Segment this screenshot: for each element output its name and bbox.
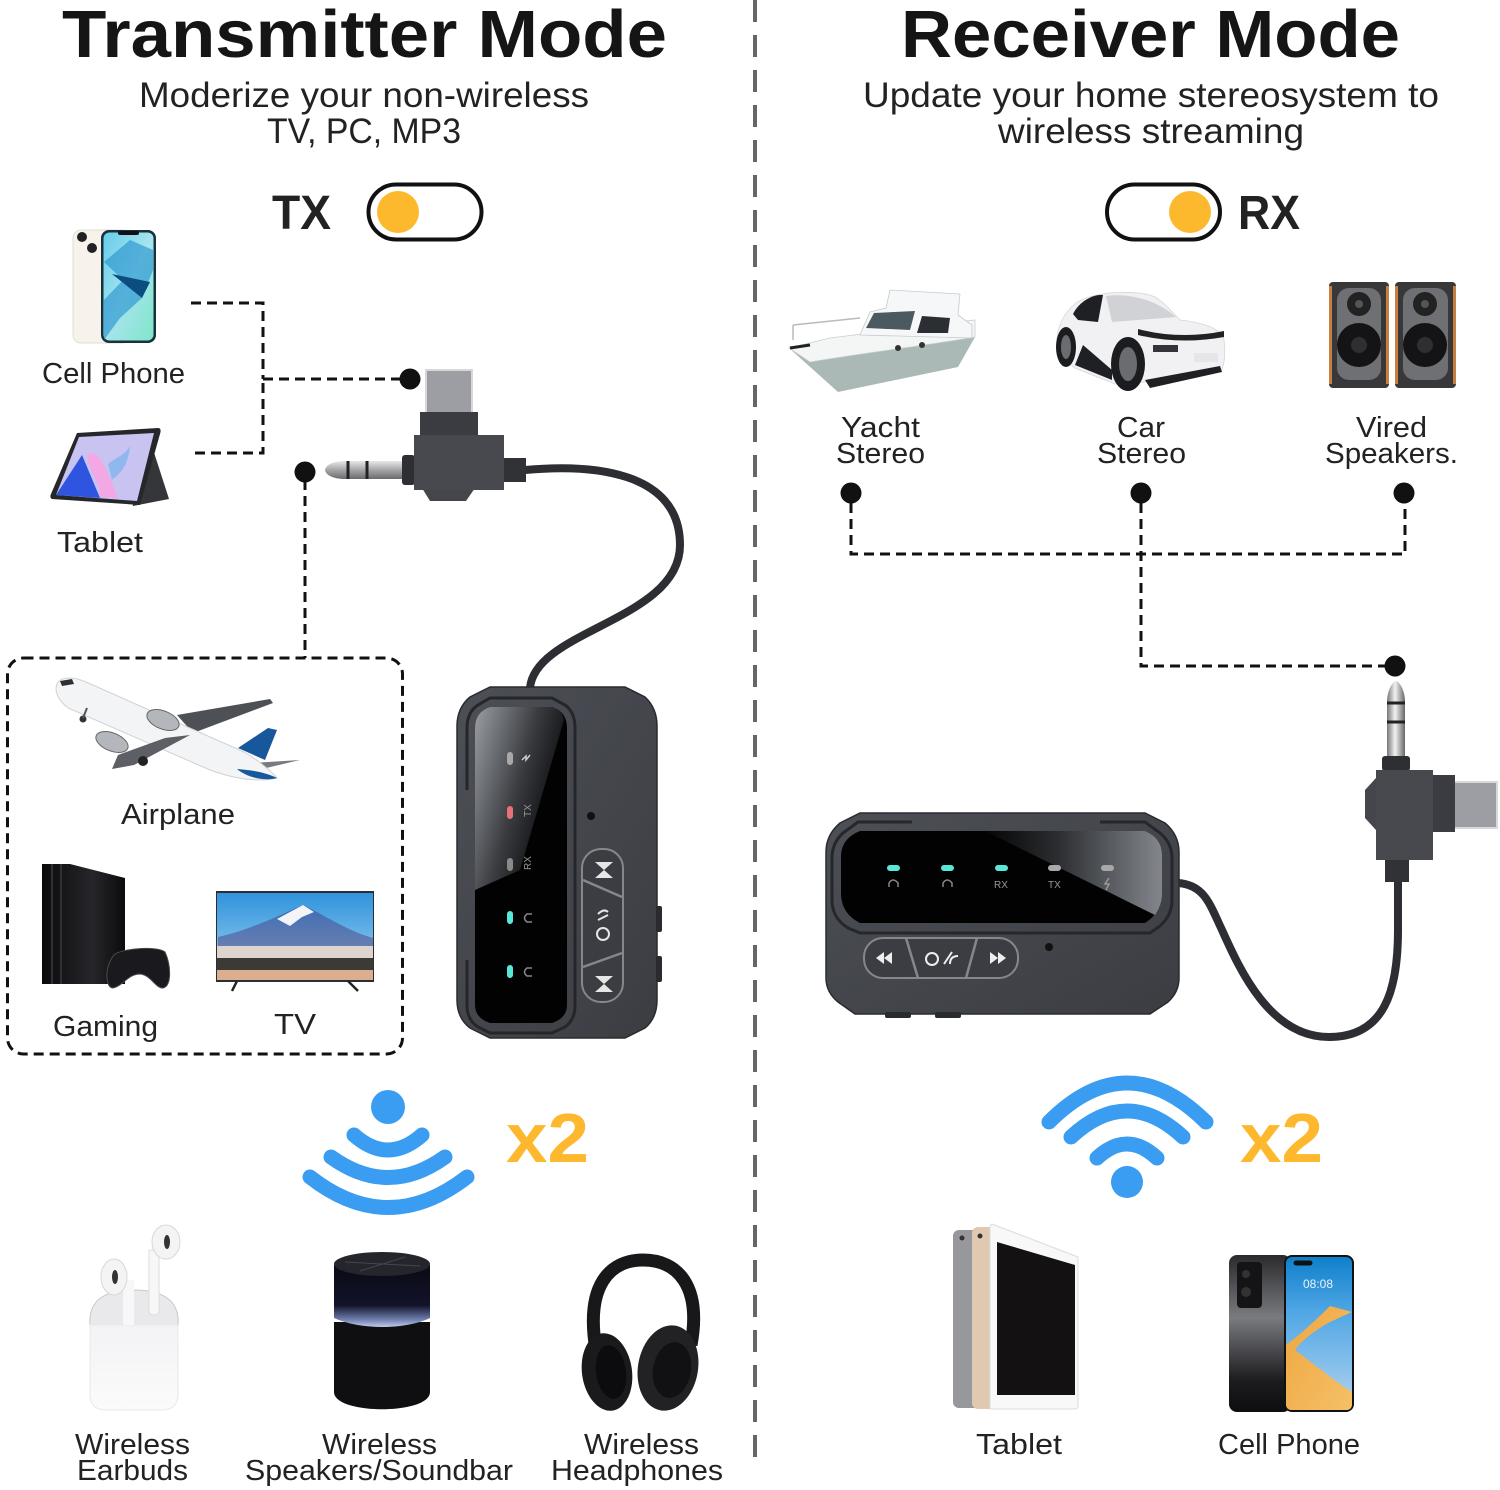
USB-C plug (1454, 782, 1497, 828)
LEDs (887, 865, 900, 871)
device: transmitter adapter with cable (325, 370, 680, 1038)
label: wired speakers: Speakers. (1325, 438, 1458, 470)
T-joint (420, 412, 478, 436)
center divider (753, 0, 757, 1460)
label: cell phone: Cell Phone (42, 358, 185, 390)
icon: wireless speaker (334, 1252, 430, 1409)
TX switch (272, 184, 482, 240)
label: wireless earbuds (75, 1429, 190, 1487)
unit body (457, 687, 657, 1038)
AUX plug (325, 461, 402, 479)
label: wireless headphones: Wireless (584, 1429, 699, 1461)
cable (1178, 878, 1398, 1037)
buttons (582, 849, 623, 1002)
icon: wireless headphones (577, 1260, 705, 1416)
icon: gaming console (42, 864, 170, 988)
icon: airplane (56, 678, 300, 780)
heading: transmitter mode: TV, PC, MP3 (267, 112, 461, 151)
wifi x2 transmit (310, 1090, 589, 1208)
heading: receiver mode: Update your home stereosystem to (863, 76, 1439, 115)
label: wireless headphones (551, 1429, 723, 1487)
wifi x2 receive (1049, 1083, 1323, 1198)
device: receiver adapter with cable (826, 681, 1497, 1037)
icon: tablets (953, 1224, 1078, 1409)
RX switch (1107, 184, 1300, 240)
AUX plug (1387, 681, 1405, 762)
label: tablet: Tablet (57, 527, 143, 559)
label: car stereo: Stereo (1097, 438, 1186, 470)
icon: speakers (1329, 282, 1456, 388)
heading: receiver mode (863, 0, 1439, 151)
heading: transmitter mode: Moderize your non-wireless (139, 76, 589, 115)
connector lines: phone and tablet to USB-C (191, 303, 420, 453)
label: wired speakers (1325, 412, 1458, 470)
icon: cell phone (73, 230, 156, 343)
label: airplane: Airplane (121, 799, 235, 831)
LED labels: RX (994, 880, 1008, 891)
heading: receiver mode: wireless streaming (997, 112, 1304, 151)
label: gaming: Gaming (53, 1011, 158, 1043)
label: wireless speakers (245, 1429, 513, 1487)
label: yacht stereo (836, 412, 925, 470)
icon: phones: 08:08 (1303, 1277, 1333, 1291)
unit body (826, 813, 1179, 1014)
TX switch: TX (272, 187, 331, 240)
icon: yacht (789, 290, 975, 392)
label: yacht stereo: Stereo (836, 438, 925, 470)
icon: tablet (50, 428, 169, 506)
label: car stereo: Car (1117, 412, 1165, 444)
panel: AUX devices (8, 658, 402, 1054)
icon: phones (1229, 1255, 1354, 1412)
wifi x2 transmit: x2 (506, 1099, 589, 1177)
label: wireless earbuds: Wireless (75, 1429, 190, 1461)
icon: wireless earbuds (90, 1225, 180, 1410)
label: tablet: Tablet (976, 1429, 1062, 1461)
label: wireless headphones: Headphones (551, 1455, 723, 1487)
T-joint (1433, 775, 1455, 832)
buttons (864, 938, 1018, 978)
label: cell phone: Cell Phone (1218, 1429, 1360, 1461)
heading: transmitter mode (62, 0, 667, 151)
device: receiver adapter with cable: TX (1048, 880, 1061, 891)
connector lines: receiver sources (840, 482, 1414, 676)
label: wireless speakers: Wireless (322, 1429, 437, 1461)
wifi x2 receive: x2 (1240, 1099, 1323, 1177)
label: wireless earbuds: Earbuds (77, 1455, 188, 1487)
icon: TV (216, 891, 374, 991)
device: transmitter adapter with cable: RX (523, 856, 534, 870)
label: yacht stereo: Yacht (841, 412, 920, 444)
cable (525, 468, 680, 688)
label: wired speakers: Vired (1356, 412, 1427, 444)
label: wireless speakers: Speakers/Soundbar (245, 1455, 513, 1487)
RX switch: RX (1238, 187, 1300, 240)
USB-C plug (426, 370, 472, 413)
label: car stereo (1097, 412, 1186, 470)
LEDs (507, 752, 513, 765)
LED labels: TX (523, 804, 534, 817)
connector line: aux to devices box (294, 462, 316, 658)
label: TV: TV (274, 1009, 317, 1041)
icon: car (1056, 292, 1225, 391)
